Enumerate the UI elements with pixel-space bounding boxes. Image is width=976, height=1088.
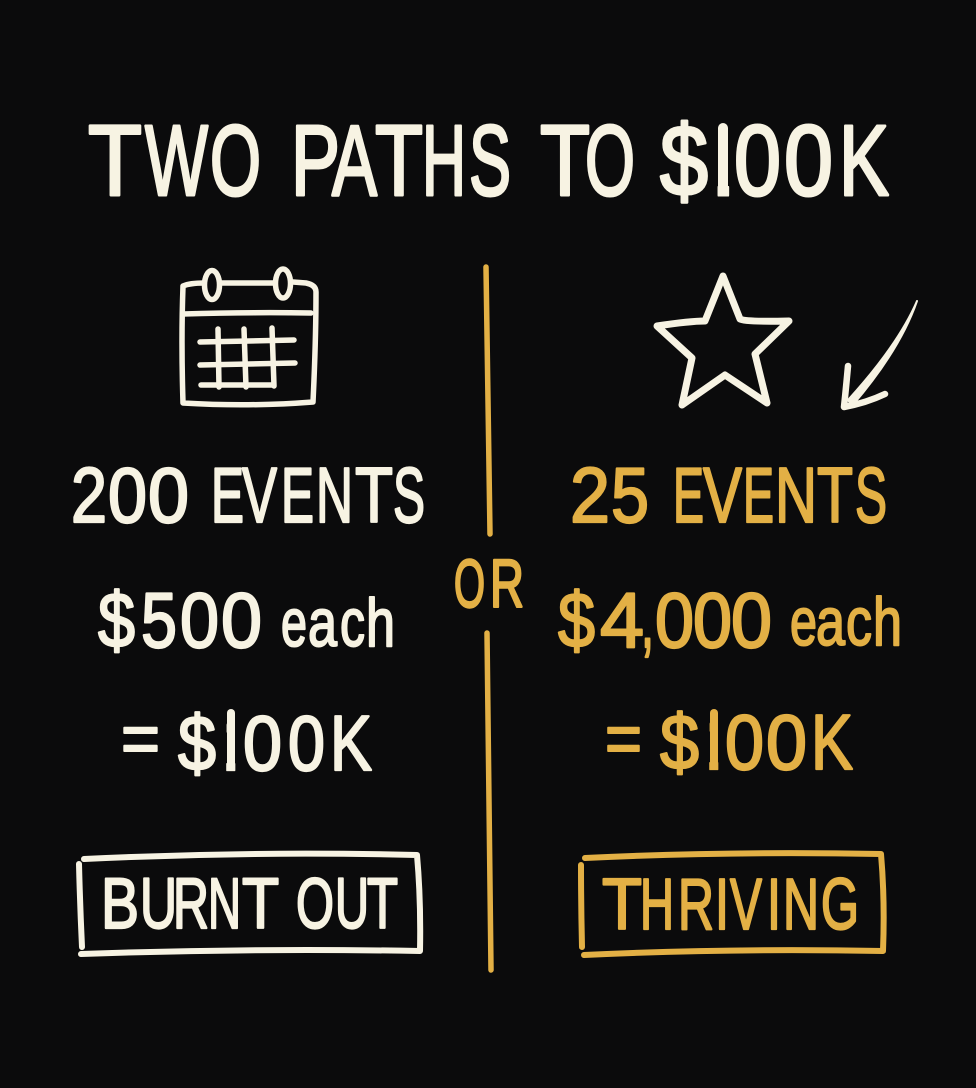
- text: $4,000 each: c: [846, 584, 872, 660]
- title: T: [375, 105, 423, 217]
- text: 200 events: N: [316, 451, 353, 539]
- text: equals $100K: $: [660, 698, 699, 786]
- title: K: [839, 105, 889, 217]
- text: $500 each: h: [366, 585, 395, 661]
- badge: thriving: N: [783, 865, 819, 945]
- text: 200 events: 0: [108, 451, 147, 539]
- text: 200 events: 0: [148, 451, 189, 539]
- title: 0: [734, 105, 781, 217]
- title: [88, 105, 889, 217]
- text: 25 events: T: [817, 451, 853, 539]
- text: 200 events: V: [242, 451, 277, 539]
- text: 25 events: E: [673, 451, 704, 539]
- text: $4,000 each: ,: [641, 576, 654, 664]
- icon: calendar: [182, 269, 316, 405]
- text: $4,000 each: 0: [655, 576, 694, 664]
- text: equals $100K: K: [330, 699, 372, 787]
- text: 200 events: E: [211, 451, 244, 539]
- badge: burnt out: T: [367, 865, 398, 944]
- badge: burnt out: U: [335, 865, 369, 944]
- text: 200 events: T: [355, 451, 393, 539]
- text: $4,000 each: e: [790, 584, 817, 660]
- text: equals $100K: =: [121, 699, 160, 779]
- title: 1: [716, 105, 730, 217]
- badge: burnt out: B: [101, 865, 139, 944]
- title: W: [145, 105, 208, 217]
- badge: burnt out: [79, 854, 420, 954]
- text: 200 events: 2: [71, 451, 107, 539]
- text: 25 events: 5: [611, 451, 649, 539]
- text: $4,000 each: 0: [693, 576, 732, 664]
- text: equals $100K: 0: [243, 699, 282, 787]
- title: A: [332, 105, 377, 217]
- badge: thriving: [581, 853, 884, 955]
- text: $500 each: 0: [180, 576, 219, 664]
- badge: thriving: I: [715, 865, 729, 945]
- text: $4,000 each: a: [816, 584, 845, 660]
- text: $500 each: $: [98, 576, 135, 664]
- text: $500 each: 0: [221, 576, 262, 664]
- title: $: [660, 105, 708, 217]
- text: 25 events: N: [775, 451, 817, 539]
- text: equals $100K: 1: [708, 698, 719, 786]
- text: $500 each: 5: [141, 576, 177, 664]
- badge: burnt out: U: [140, 865, 177, 944]
- badge: burnt out: T: [242, 865, 278, 944]
- text: equals $100K: 0: [766, 698, 807, 786]
- text: equals $100K: K: [811, 698, 853, 786]
- title: S: [469, 105, 511, 217]
- title: H: [422, 105, 466, 217]
- panel: right path, 25 events: [558, 276, 917, 955]
- text: equals $100K: 0: [725, 698, 764, 786]
- label: OR: O: [454, 546, 485, 622]
- title: 0: [784, 105, 833, 217]
- title: T: [88, 105, 142, 217]
- divider line: lower: [487, 633, 491, 970]
- text: 200 events: S: [393, 451, 425, 539]
- text: 25 events: V: [703, 451, 742, 539]
- center divider with OR: [454, 267, 524, 970]
- badge: thriving: I: [767, 865, 781, 945]
- text: equals $100K: [121, 699, 372, 787]
- badge: thriving: R: [678, 865, 714, 945]
- text: $4,000 each: $: [558, 576, 595, 664]
- badge: thriving: H: [640, 865, 674, 945]
- text: $500 each: [98, 576, 395, 664]
- text: 200 events: E: [281, 451, 314, 539]
- text: equals $100K: 0: [288, 699, 325, 787]
- text: $500 each: a: [308, 585, 337, 661]
- title: O: [210, 105, 261, 217]
- text: equals $100K: [605, 698, 853, 786]
- title: T: [540, 105, 590, 217]
- icon: star: [657, 276, 789, 405]
- badge: burnt out: R: [173, 865, 209, 944]
- text: $4,000 each: h: [873, 584, 902, 660]
- title: P: [291, 105, 340, 217]
- text: 25 events: S: [855, 451, 887, 539]
- text: $4,000 each: [558, 576, 902, 664]
- text: 25 events: E: [743, 451, 774, 539]
- text: equals $100K: 1: [225, 699, 236, 787]
- badge: burnt out: O: [296, 865, 334, 944]
- badge: burnt out: N: [208, 865, 241, 944]
- text: 25 events: 2: [570, 451, 610, 539]
- text: $4,000 each: 4: [600, 576, 644, 664]
- text: equals $100K: $: [178, 699, 216, 787]
- icon: arrow pointing down left: [844, 301, 917, 407]
- text: $4,000 each: 0: [731, 576, 772, 664]
- title: O: [585, 105, 635, 217]
- badge: thriving: T: [602, 865, 642, 945]
- label: OR: R: [490, 546, 524, 622]
- text: $500 each: c: [340, 585, 365, 661]
- badge: thriving: V: [730, 865, 762, 945]
- panel: left path, 200 events: [71, 269, 425, 954]
- badge: thriving: G: [821, 865, 859, 945]
- divider line: upper: [486, 267, 490, 534]
- text: $500 each: e: [281, 585, 307, 661]
- text: equals $100K: =: [605, 699, 642, 779]
